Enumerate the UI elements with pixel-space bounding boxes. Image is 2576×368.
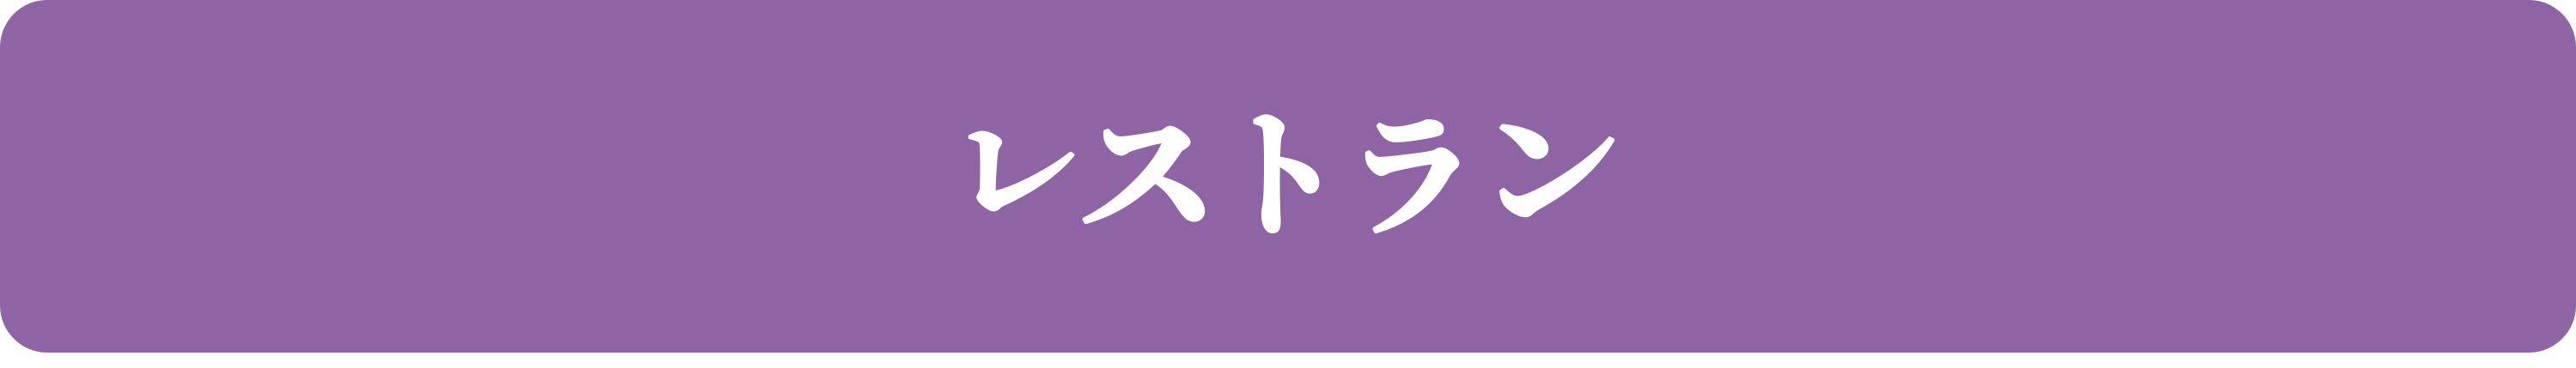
title: レストラン: レ [949,114,1079,232]
title: レストラン: ス [1077,105,1218,250]
title: レストラン: ン [1477,103,1620,244]
title: レストラン [949,103,1620,254]
title: レストラン: ラ [1346,107,1476,253]
title: レストラン: ト [1220,103,1341,254]
